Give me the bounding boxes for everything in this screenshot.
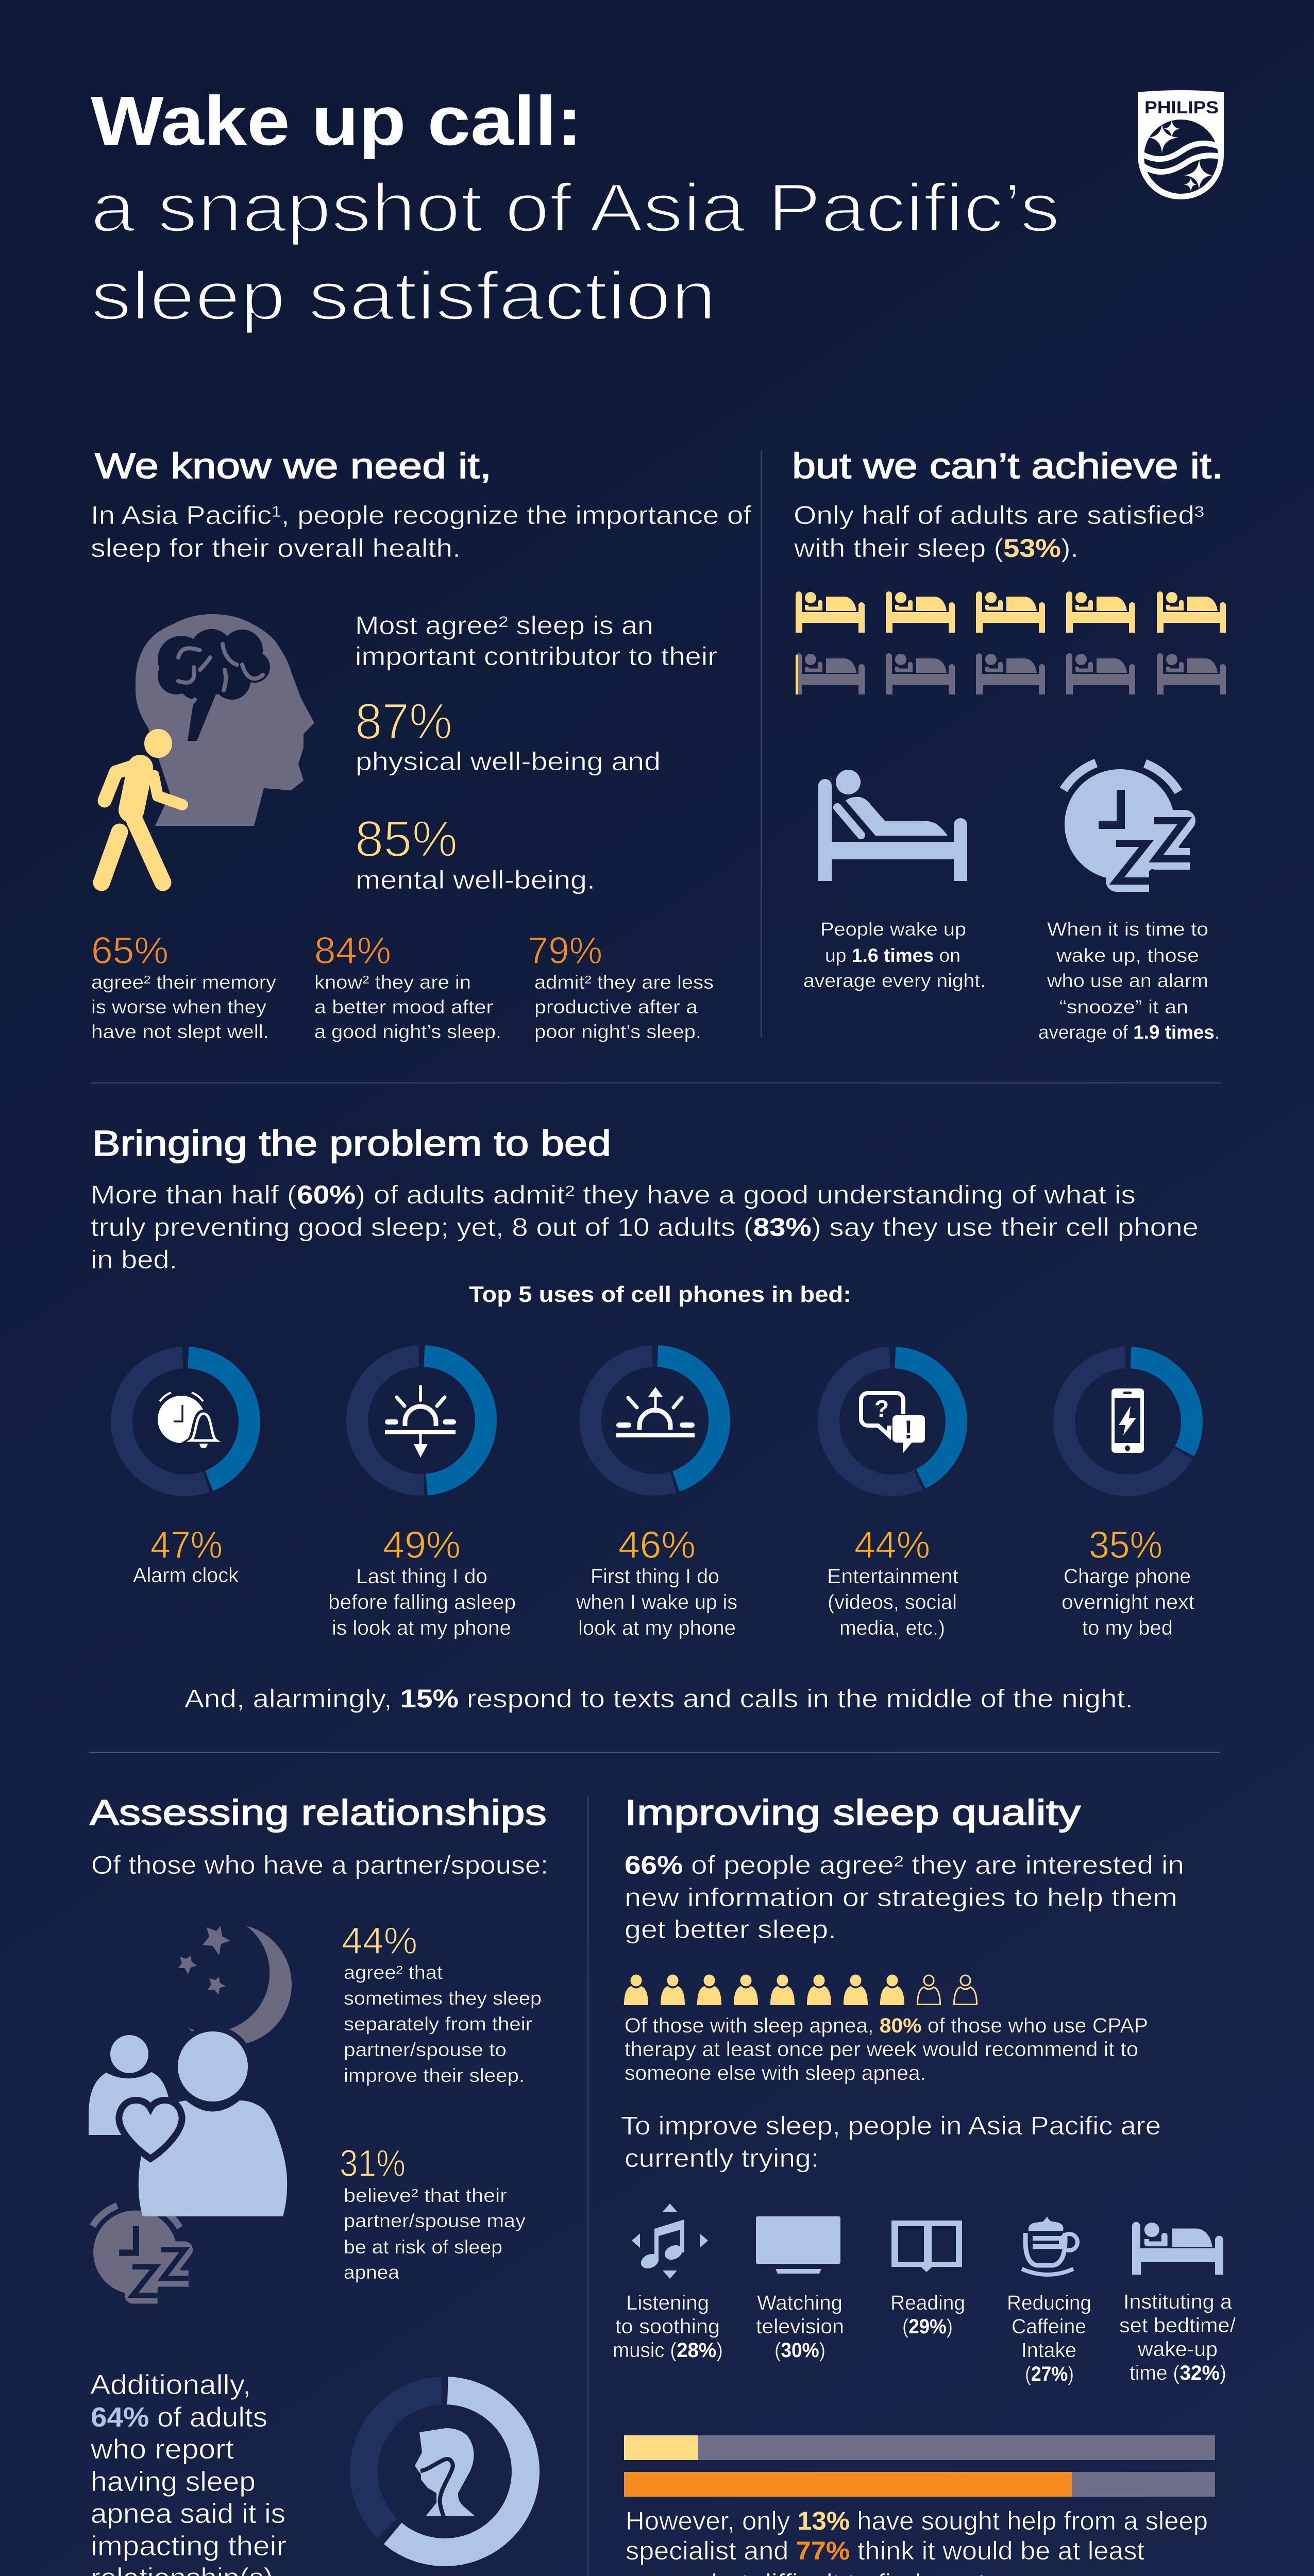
stat: 79% productive: poor night’s sleep. <box>534 1021 701 1042</box>
intro text: new information or strategies to help them <box>625 1883 1177 1912</box>
intro text: sleep for their overall health. <box>91 534 461 563</box>
label: to soothing <box>615 2315 720 2338</box>
title line 2: a snapshot of Asia Pacific’s <box>91 170 1060 246</box>
title <box>91 82 1060 334</box>
item: watching television <box>756 2216 844 2362</box>
stat: 87% physical <box>355 693 661 776</box>
icon: question and exclamation speech bubbles: ! <box>904 1415 913 1444</box>
label: Instituting a <box>1123 2291 1233 2313</box>
item: listening to music <box>613 2204 723 2362</box>
label <box>756 2292 844 2362</box>
stat: 35% charge phone: 35% <box>1089 1523 1163 1566</box>
heading: We know we need it, <box>95 446 492 486</box>
stat: 35% charge phone <box>1062 1523 1194 1639</box>
text: CPAP recommendation: Of those with sleep apnea, 80% of those who use CPAP <box>625 2014 1148 2037</box>
text: sought help from specialist <box>626 2506 1208 2576</box>
stat: 31% sleep apnea risk: partner/spouse may <box>344 2210 526 2231</box>
text: CPAP recommendation: therapy at least once per week would recommend it to <box>625 2038 1138 2061</box>
icon: crescent moon and stars <box>178 1926 292 2045</box>
stat: 31% sleep apnea risk <box>340 2143 526 2283</box>
subheading: top 5 uses: Top 5 uses of cell phones in bed: <box>469 1282 851 1307</box>
bar chart: 13% and 77% <box>624 2435 1215 2497</box>
label: music (28%) <box>613 2339 723 2362</box>
stat: 79% productive: productive after a <box>534 996 698 1018</box>
label: set bedtime/ <box>1119 2314 1236 2337</box>
label: Listening <box>626 2292 709 2314</box>
heading: but we can’t achieve it. <box>792 446 1223 486</box>
text: wake up 1.6 times <box>803 919 986 991</box>
text: snooze 1.9 times: “snooze” it an <box>1059 996 1188 1018</box>
stat: 65% memory: agree² their memory <box>91 972 277 993</box>
label: Caffeine <box>1012 2315 1086 2338</box>
stat: 84% mood: a better mood after <box>314 996 493 1018</box>
panel: assessing relationships <box>89 1792 548 2576</box>
icon: question and exclamation speech bubbles <box>861 1393 925 1455</box>
icon: couple with heart <box>89 2026 287 2216</box>
intro text <box>625 1851 1184 1944</box>
icon: open book <box>891 2221 962 2272</box>
text: wake up 1.6 times: up 1.6 times on <box>825 945 961 966</box>
stat: 49% last thing <box>328 1523 516 1639</box>
label <box>1119 2291 1236 2384</box>
icon: smartphone charging <box>1111 1388 1144 1453</box>
stat: 49% last thing: is look at my phone <box>332 1617 511 1639</box>
text: sought help from specialist: specialist and 77% think it would be at least <box>626 2536 1144 2565</box>
stat: 49% last thing: Last thing I do <box>356 1565 487 1588</box>
stat: 44% sleep separately <box>342 1920 542 2086</box>
stat: 44% entertainment: 44% <box>854 1523 930 1566</box>
text: 64% impact on relationships: impacting their <box>91 2531 287 2562</box>
intro text <box>794 501 1204 563</box>
intro text: Only half of adults are satisfied³ <box>794 501 1204 530</box>
icon: Philips shield logo <box>1138 90 1224 199</box>
label: Intake <box>1021 2339 1076 2362</box>
stat: 79% productive <box>528 930 714 1042</box>
stat: 46% first thing: 46% <box>618 1523 696 1566</box>
icon: television <box>756 2216 840 2274</box>
stat: 46% first thing: when I wake up is <box>576 1591 737 1614</box>
intro text: with their sleep ( 53%). <box>794 534 1079 563</box>
stat: 84% mood: a good night’s sleep. <box>314 1021 501 1042</box>
stat: 79% productive: admit² they are less <box>534 972 714 993</box>
chart: ten bed pictogram <box>796 591 1226 694</box>
paragraph: in bed. <box>91 1245 177 1274</box>
icon: coffee cup <box>1022 2216 1077 2275</box>
stat: 44% entertainment: Entertainment <box>827 1565 958 1588</box>
title line 3: sleep satisfaction <box>91 258 716 334</box>
stat: 49% last thing: 49% <box>383 1523 461 1566</box>
donut: 64% sleep apnea impact <box>364 2391 526 2552</box>
stat: 31% sleep apnea risk: 31% <box>340 2143 406 2184</box>
stat: 65% memory: have not slept well. <box>91 1021 269 1042</box>
item: reading <box>890 2221 965 2338</box>
intro text: 66% of people agree² they are interested in <box>625 1851 1184 1879</box>
text: most agree: Most agree² sleep is an <box>355 611 653 640</box>
label: Watching <box>757 2292 843 2314</box>
stat: 31% sleep apnea risk: apnea <box>344 2262 399 2283</box>
text: snooze 1.9 times: average of 1.9 times. <box>1038 1022 1220 1043</box>
item: reducing caffeine <box>1007 2216 1091 2385</box>
label: television <box>756 2315 844 2338</box>
panel: improving sleep quality <box>613 1792 1236 2576</box>
donut: 46% first thing <box>591 1356 719 1485</box>
stat: 44% sleep separately: agree² that <box>344 1962 443 1983</box>
stat: 87% physical: physical well-being and <box>356 747 661 776</box>
stat: 47% alarm clock: 47% <box>150 1523 223 1566</box>
icon: person in bed <box>1132 2222 1223 2275</box>
panel: but we can't achieve it <box>792 446 1226 1043</box>
icon: snooze clock behind couple <box>93 2206 189 2295</box>
stat: 44% entertainment <box>827 1523 958 1639</box>
stat: 35% charge phone: Charge phone <box>1064 1565 1191 1588</box>
stat: 47% alarm clock <box>133 1523 239 1587</box>
paragraph <box>91 1180 1199 1274</box>
stat: 44% entertainment: media, etc.) <box>839 1617 945 1639</box>
stat: 84% mood <box>314 930 501 1042</box>
stat: 31% sleep apnea risk: believe² that their <box>344 2185 507 2206</box>
text: 64% impact on relationships: 64% of adults <box>91 2402 267 2433</box>
label: (30%) <box>774 2339 826 2362</box>
icon: snooze alarm clock <box>1064 763 1190 881</box>
stat: 85% mental: 85% <box>355 810 458 867</box>
label: wake-up <box>1137 2338 1218 2361</box>
text: 64% impact on relationships: apnea said it is <box>91 2498 285 2529</box>
text: sought help from specialist: However, only 13% have sought help from a sleep <box>626 2506 1208 2535</box>
stat: 44% sleep separately: 44% <box>342 1920 417 1962</box>
label <box>613 2292 723 2362</box>
text: 15% respond at night: And, alarmingly, 15% respond to texts and calls in the middle of the night. <box>184 1684 1133 1713</box>
heading: Bringing the problem to bed <box>92 1123 611 1163</box>
icon: person awake in bed <box>818 770 967 881</box>
label: Reducing <box>1007 2292 1091 2314</box>
chart: ten person pictogram <box>624 1974 977 2005</box>
icon: head with brain and walking person <box>102 614 314 883</box>
donut: 47% alarm clock <box>122 1358 249 1485</box>
paragraph: More than half ( 60% ) of adults admit² they have a good understanding of what is <box>91 1180 1136 1209</box>
stat: 84% mood: know² they are in <box>314 972 471 993</box>
text: to improve sleep <box>621 2111 1161 2173</box>
item: set bedtime <box>1119 2222 1236 2384</box>
heading: Improving sleep quality <box>625 1792 1081 1833</box>
stat: 79% productive: 79% <box>528 930 602 972</box>
text: snooze 1.9 times: who use an alarm <box>1047 970 1208 991</box>
stat: 49% last thing: before falling asleep <box>328 1591 516 1614</box>
donut: 49% last thing <box>357 1356 486 1485</box>
text: most agree: important contributor to their <box>355 642 717 671</box>
stat: 44% sleep separately: separately from their <box>344 2013 532 2035</box>
icon: question and exclamation speech bubbles: ? <box>874 1395 889 1422</box>
intro text: Of those who have a partner/spouse: <box>91 1851 548 1879</box>
title line bold: Wake up call: <box>91 82 582 160</box>
label: (29%) <box>902 2315 953 2338</box>
stat: 85% mental <box>355 810 595 894</box>
text: snooze 1.9 times: When it is time to <box>1047 919 1208 940</box>
label: (27%) <box>1025 2363 1074 2385</box>
panel: bringing the problem to bed <box>91 1123 1199 1713</box>
stat: 44% sleep separately: sometimes they sleep <box>344 1988 542 2009</box>
stat: 46% first thing: First thing I do <box>591 1565 719 1588</box>
text: 64% impact on relationships: who report <box>90 2434 234 2465</box>
icon: sun going down <box>385 1386 456 1458</box>
icon: Philips shield logo: PHILIPS <box>1144 98 1219 117</box>
text: wake up 1.6 times: People wake up <box>820 919 966 940</box>
intro text: get better sleep. <box>625 1915 836 1944</box>
label <box>890 2292 965 2338</box>
panel: we know we need it <box>91 446 751 1042</box>
icon: music note <box>632 2204 708 2279</box>
text: to improve sleep: currently trying: <box>625 2144 819 2173</box>
icon: head with airway <box>415 2428 475 2516</box>
icon: sun coming up <box>616 1387 695 1435</box>
donut: 35% charge phone <box>1064 1358 1192 1485</box>
stat: 46% first thing: look at my phone <box>578 1617 736 1639</box>
heading: Assessing relationships <box>90 1792 547 1833</box>
stat: 44% sleep separately: improve their sleep. <box>344 2065 525 2086</box>
label: time (32%) <box>1130 2362 1226 2384</box>
stat: 46% first thing <box>576 1523 737 1639</box>
text: most agree <box>355 611 717 671</box>
text: 64% impact on relationships: Additionally, <box>90 2369 251 2400</box>
stat: 65% memory: is worse when they <box>91 996 267 1018</box>
stat: 35% charge phone: to my bed <box>1082 1617 1173 1639</box>
text: 64% impact on relationships: having sleep <box>91 2466 256 2497</box>
stat: 65% memory: 65% <box>91 930 169 972</box>
stat: 35% charge phone: overnight next <box>1062 1591 1194 1614</box>
intro text <box>91 501 751 563</box>
label <box>1007 2292 1091 2385</box>
stat: 44% entertainment: (videos, social <box>828 1591 957 1614</box>
text: CPAP recommendation <box>625 2014 1148 2084</box>
text: wake up 1.6 times: average every night. <box>803 970 986 991</box>
stat: 47% alarm clock: Alarm clock <box>133 1564 239 1587</box>
stat: 44% sleep separately: partner/spouse to <box>344 2039 507 2060</box>
text: snooze 1.9 times: wake up, those <box>1056 945 1199 966</box>
intro text: In Asia Pacific¹, people recognize the importance of <box>91 501 751 530</box>
stat: 87% physical: 87% <box>355 693 452 750</box>
icon: alarm clock with bell <box>158 1393 217 1448</box>
label: Reading <box>890 2292 965 2314</box>
stat: 31% sleep apnea risk: be at risk of sleep <box>344 2236 502 2258</box>
stat: 65% memory <box>91 930 277 1042</box>
stat: 85% mental: mental well-being. <box>356 866 595 894</box>
text: CPAP recommendation: someone else with sleep apnea. <box>625 2062 926 2084</box>
text: snooze 1.9 times <box>1038 919 1220 1043</box>
stat: 84% mood: 84% <box>314 930 391 972</box>
donut: 44% entertainment <box>829 1358 956 1485</box>
paragraph: truly preventing good sleep; yet, 8 out of 10 adults ( 83% ) say they use their cell phone <box>91 1213 1199 1242</box>
text: 64% impact on relationships <box>90 2369 287 2576</box>
text: to improve sleep: To improve sleep, people in Asia Pacific are <box>621 2111 1161 2140</box>
